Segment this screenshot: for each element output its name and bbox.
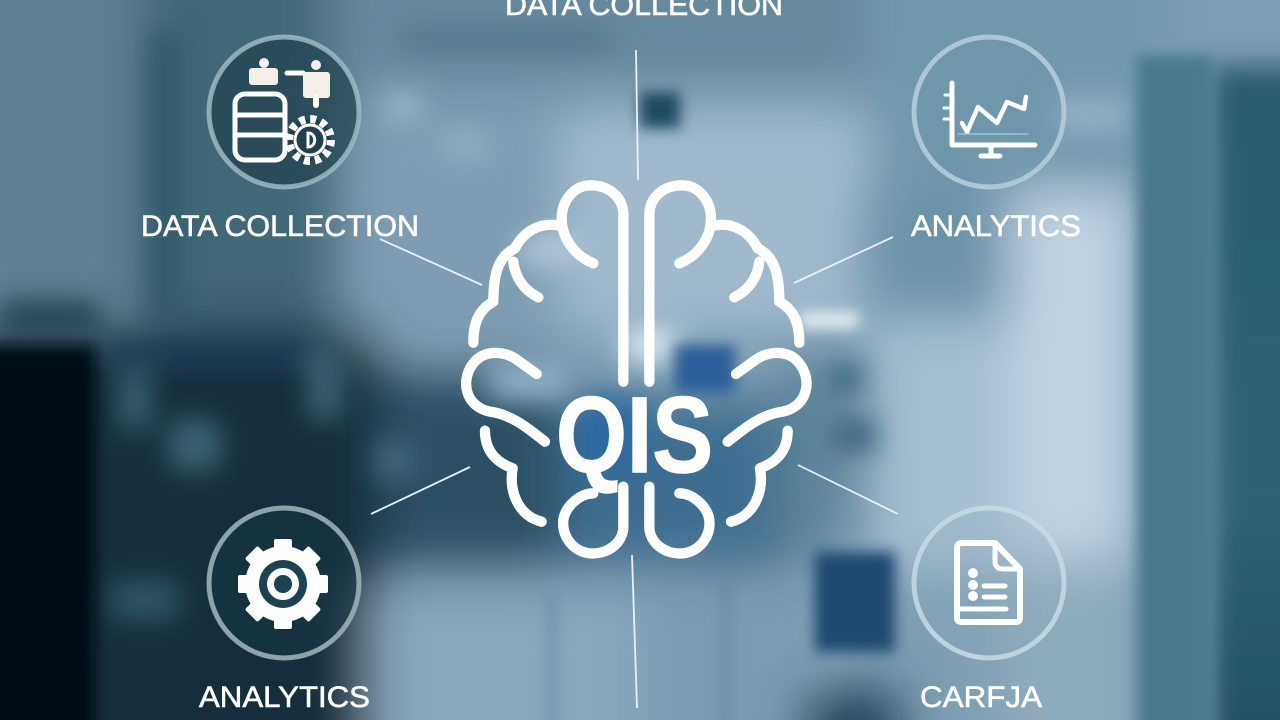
label: ANALYTICS (top right): ANALYTICS [911, 210, 1081, 243]
QIS centre label: QIS [556, 374, 713, 495]
node: analytics (top right) [914, 37, 1064, 187]
label: ANALYTICS (bottom left): ANALYTICS [199, 681, 370, 714]
label: CARFJA: CARFJA [920, 681, 1042, 714]
node: data collection (top left) [209, 37, 359, 187]
node: report (bottom right) [914, 508, 1064, 658]
connector line: top [636, 50, 638, 180]
connector line: bottom [632, 555, 637, 708]
connector line: upper left [380, 239, 482, 285]
node: settings (bottom left) [209, 508, 359, 658]
connector line: lower left [371, 467, 470, 514]
connector line: upper right [794, 237, 893, 283]
connector line: lower right [798, 465, 898, 514]
icon: database with gear and connected nodes [235, 58, 331, 161]
icon: line chart on monitor [944, 83, 1035, 156]
brain icon [466, 185, 807, 553]
icon: gear [238, 539, 328, 629]
label: DATA COLLECTION: DATA COLLECTION [141, 210, 419, 243]
icon: document [957, 543, 1020, 622]
